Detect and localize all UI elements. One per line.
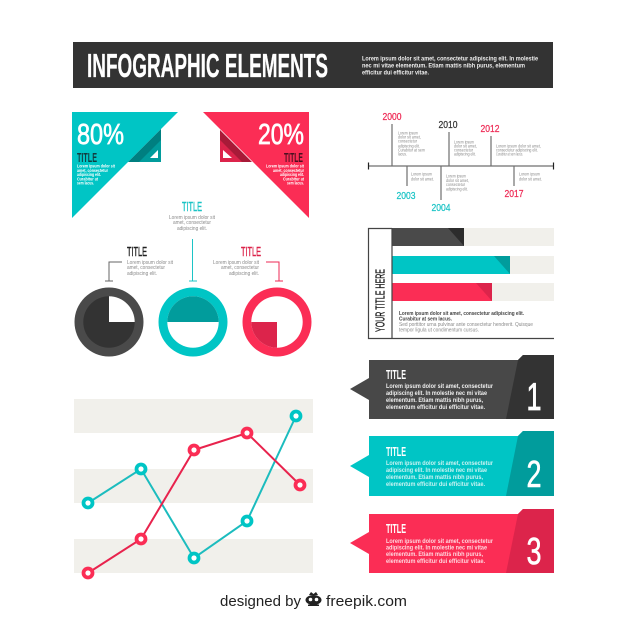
step text: Lorem ipsum dolor sit amet, consectetur xyxy=(386,539,494,545)
footer credit: freepik.com xyxy=(326,594,407,610)
panel: 80% corner xyxy=(72,112,178,218)
footer credit xyxy=(220,592,407,610)
panel: teal callout heading: TITLE xyxy=(182,199,202,214)
panel: bar chart xyxy=(368,228,554,339)
label: TITLE xyxy=(77,151,97,165)
body text: sem lacus. xyxy=(287,180,304,186)
timeline notes: Curabitur at sem xyxy=(398,147,425,152)
timeline notes: adipiscing elit. xyxy=(454,152,476,157)
years: 2017 xyxy=(504,188,524,200)
icon: freepik mascot xyxy=(306,592,322,606)
bar description: Curabitur at sem lacus. xyxy=(399,317,453,323)
panel: red callout heading: TITLE xyxy=(241,244,261,259)
timeline notes: Lorem ipsum xyxy=(398,130,418,136)
panel: dark callout heading xyxy=(127,244,173,277)
step title: TITLE xyxy=(386,444,406,459)
step text: elementum. Etiam mattis nibh purus, xyxy=(386,475,483,481)
red bar xyxy=(392,283,492,301)
red series xyxy=(84,428,304,578)
panel: red callout heading: amet, consectetur xyxy=(221,265,259,271)
timeline notes: adipiscing elit. xyxy=(398,143,420,148)
step text: adipiscing elit. In molestie nec mi vitae xyxy=(386,391,488,397)
step number: 2 xyxy=(526,454,542,496)
timeline notes: Lorem ipsum xyxy=(519,172,540,177)
timeline notes: lacus. xyxy=(398,152,407,156)
timeline notes: dolor sit amet, xyxy=(454,144,477,149)
timeline notes: adipiscing elit. xyxy=(446,186,468,191)
frame xyxy=(368,228,554,339)
step text: Lorem ipsum dolor sit amet, consectetur xyxy=(386,384,494,390)
header description: Lorem ipsum dolor sit amet, consectetur adipiscing elit. In molestie xyxy=(362,56,538,62)
footer credit: designed by xyxy=(220,594,302,610)
panel: teal callout heading: Lorem ipsum dolor sit xyxy=(169,215,215,221)
body text: adipiscing elit. xyxy=(280,172,304,177)
timeline notes: dolor sit amet, xyxy=(398,135,421,140)
body text: Curabitur at xyxy=(77,176,98,181)
years: 2003 xyxy=(396,190,416,202)
percentage: 20% xyxy=(258,119,304,151)
timeline notes xyxy=(398,130,542,191)
icon: red fold xyxy=(220,130,252,162)
timeline notes: consectetur adipiscing elit. xyxy=(496,148,538,153)
connectors xyxy=(105,239,283,281)
dark bar xyxy=(392,228,464,246)
panel: red callout heading: Lorem ipsum dolor sit xyxy=(213,260,259,266)
step title: TITLE xyxy=(386,367,406,382)
panel: red callout heading xyxy=(213,244,261,277)
step number: 3 xyxy=(526,531,542,573)
panel: step 1 xyxy=(350,355,554,419)
timeline notes: Lorem ipsum xyxy=(411,172,432,177)
timeline notes: Lorem ipsum dolor sit amet, xyxy=(496,144,541,149)
step text: elementum. Etiam mattis nibh purus, xyxy=(386,398,483,404)
body text xyxy=(266,164,304,186)
panel: dark callout heading: adipiscing elit. xyxy=(127,271,157,277)
timeline notes: Curabitur at sem lacus. xyxy=(496,152,523,157)
panel: teal callout heading: amet, consectetur xyxy=(173,220,211,226)
teal bar xyxy=(392,256,510,274)
panel: 20% corner xyxy=(203,112,309,218)
timeline notes: Lorem ipsum xyxy=(454,140,474,144)
timeline notes: dolor sit amet. xyxy=(411,176,434,182)
years: 2010 xyxy=(438,119,458,131)
timeline notes: Lorem ipsum xyxy=(446,174,466,179)
years: 2004 xyxy=(432,202,451,214)
label: TITLE xyxy=(284,151,303,165)
timeline notes: dolor sit amet, xyxy=(446,178,469,183)
body text: Lorem ipsum dolor sit xyxy=(266,164,304,168)
timeline notes: consectetur xyxy=(454,148,473,153)
chart: teal pie xyxy=(158,288,228,356)
years xyxy=(382,111,524,214)
step text: elementum efficitur dui efficitur vitae. xyxy=(386,405,485,411)
body text: Curabitur at xyxy=(283,176,304,181)
years: 2012 xyxy=(480,123,500,135)
body text: Lorem ipsum dolor sit xyxy=(77,164,115,168)
body text xyxy=(77,164,115,186)
title: INFOGRAPHIC ELEMENTS xyxy=(87,48,328,85)
step text: elementum efficitur dui efficitur vitae. xyxy=(386,482,485,488)
bar description: Lorem ipsum dolor sit amet, consectetur adipiscing elit. xyxy=(399,311,525,317)
icon: teal fold xyxy=(128,129,161,162)
step text xyxy=(386,384,494,411)
chart: line chart xyxy=(74,399,313,578)
header banner xyxy=(73,42,553,88)
panel: teal callout heading: adipiscing elit. xyxy=(177,226,207,232)
bar description: Sed porttitor urna pulvinar ante consectetur hendrerit. Quisque xyxy=(399,322,533,328)
step text: Lorem ipsum dolor sit amet, consectetur xyxy=(386,461,494,467)
chart: dark pie xyxy=(74,288,144,356)
body text: adipiscing elit. xyxy=(77,172,101,177)
panel: timeline xyxy=(368,111,554,214)
percentage: 80% xyxy=(77,119,124,151)
years: 2000 xyxy=(382,111,402,123)
panel: teal callout heading xyxy=(169,199,215,232)
step text xyxy=(386,461,494,488)
step number: 1 xyxy=(526,376,542,419)
timeline notes: consectetur xyxy=(398,139,417,144)
teal series xyxy=(84,412,300,562)
body text: amet, consectetur xyxy=(273,168,304,173)
bar tracks xyxy=(392,228,554,301)
body text: sem lacus. xyxy=(77,180,94,186)
panel: red callout heading: adipiscing elit. xyxy=(229,271,259,277)
bar description xyxy=(399,311,533,334)
axis xyxy=(368,124,554,200)
body text: amet, consectetur xyxy=(77,168,108,173)
header description: efficitur dui efficitur vitae. xyxy=(362,70,429,76)
step text: adipiscing elit. In molestie nec mi vitae xyxy=(386,468,488,474)
header description xyxy=(362,56,538,76)
panel: dark callout heading: amet, consectetur xyxy=(127,265,165,271)
panel: dark callout heading: TITLE xyxy=(127,244,147,259)
step title: TITLE xyxy=(386,521,406,536)
panel: step 2 xyxy=(350,431,554,496)
timeline notes: dolor sit amet. xyxy=(519,176,542,182)
step text: elementum. Etiam mattis nibh purus, xyxy=(386,552,483,558)
step text xyxy=(386,539,494,565)
step text: adipiscing elit. In molestie nec mi vitae xyxy=(386,546,488,552)
chart: red pie xyxy=(242,288,312,356)
panel: step 3 xyxy=(350,509,554,573)
step text: elementum efficitur dui efficitur vitae. xyxy=(386,559,485,565)
header description: nec mi vitae elementum. Etiam mattis nibh purus, elementum xyxy=(362,62,525,70)
panel: dark callout heading: Lorem ipsum dolor sit xyxy=(127,260,173,266)
timeline notes: consectetur xyxy=(446,182,465,187)
bar description: tempor ligula ut condimentum cursus. xyxy=(399,328,479,334)
vertical title: YOUR TITLE HERE xyxy=(374,269,388,332)
